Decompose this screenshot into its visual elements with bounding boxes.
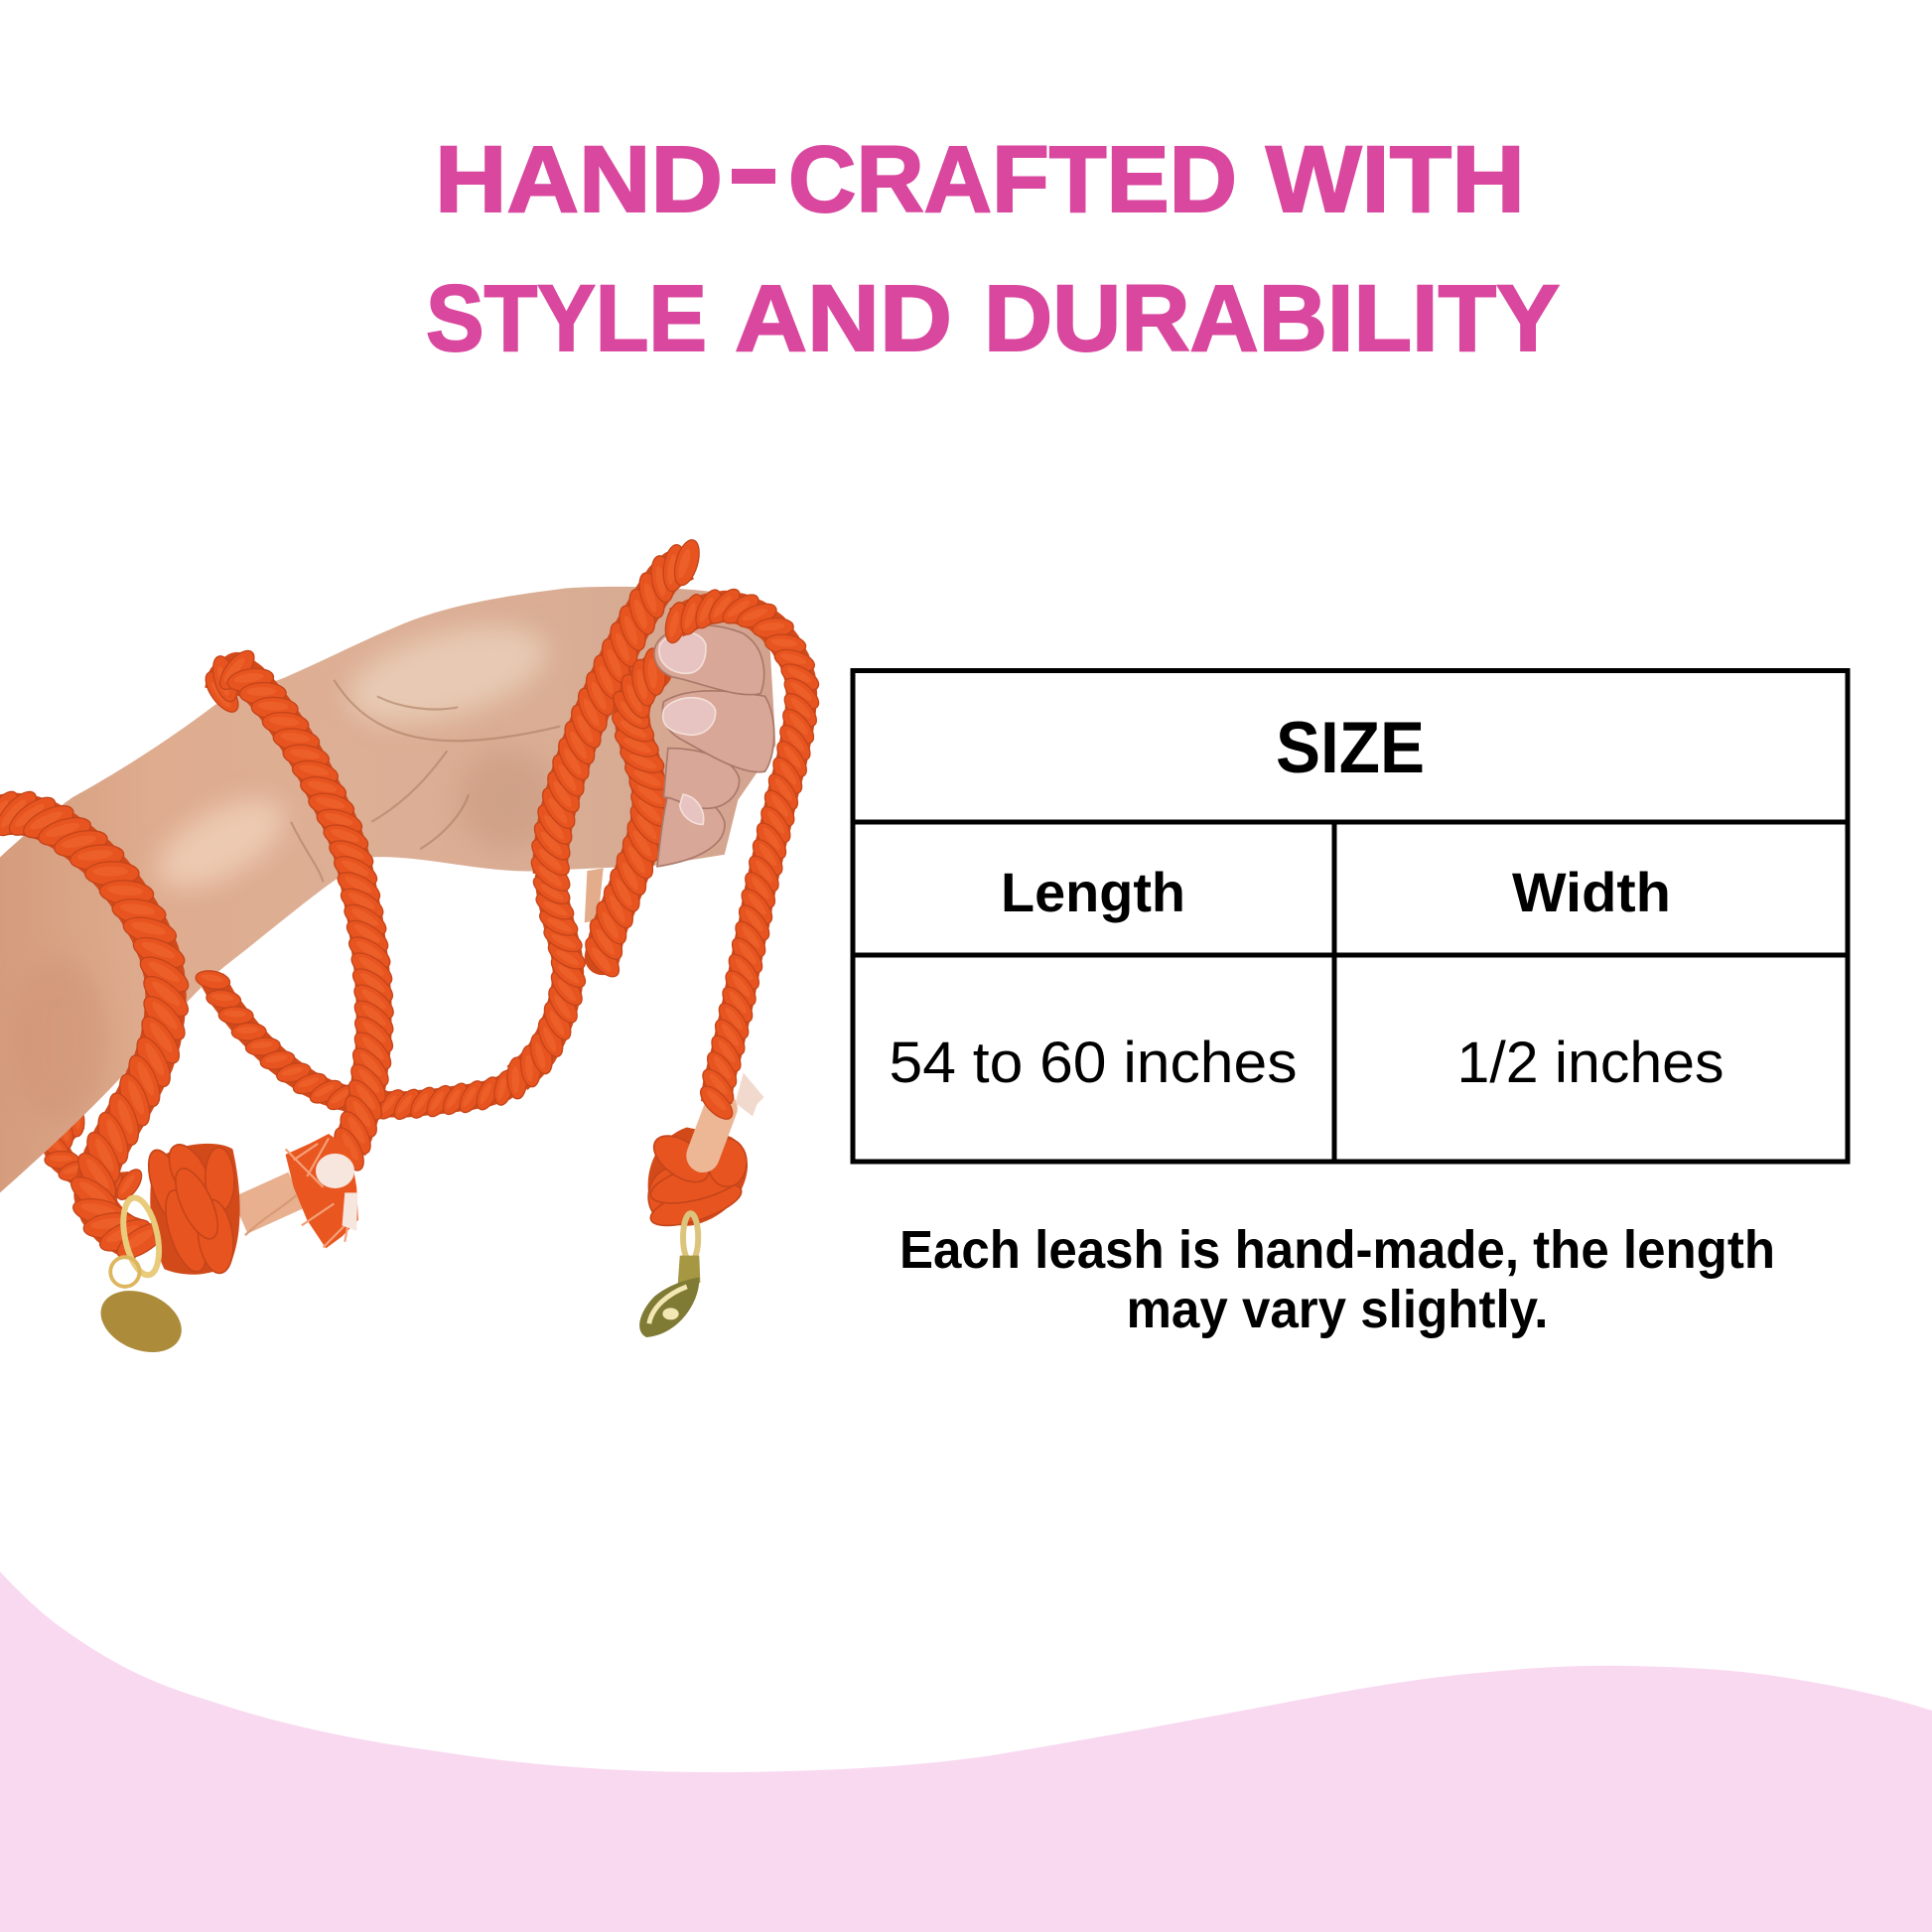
title: WITH — [1266, 127, 1525, 232]
little finger — [657, 793, 725, 867]
column heading: width: Width — [1512, 861, 1671, 923]
fingers — [654, 625, 774, 867]
panel: size table — [853, 671, 1848, 1162]
left knot — [141, 1138, 240, 1277]
arm and palm — [0, 587, 775, 1192]
right wrapped section — [703, 1108, 721, 1156]
left frayed end — [245, 1134, 358, 1248]
title: AND — [735, 266, 952, 371]
gold ring and tag — [91, 1194, 191, 1364]
rope: forearm wrap — [0, 813, 166, 1241]
rope behind arm — [55, 1119, 129, 1186]
fingernail: little finger — [680, 794, 704, 824]
index finger — [654, 625, 764, 695]
rope: upper wrist strand — [222, 670, 374, 1149]
ring finger — [663, 749, 740, 808]
title: CRAFTED — [788, 127, 1237, 232]
title: STYLE — [426, 266, 707, 371]
rope: long lower loop — [212, 563, 687, 1104]
column heading: length: Length — [1001, 861, 1185, 923]
title — [426, 127, 1560, 371]
right knot — [644, 1127, 749, 1234]
table grid — [853, 671, 1848, 1162]
note text: Each leash is hand-made, the length — [899, 1220, 1775, 1280]
title: DURABILITY — [984, 266, 1560, 371]
table heading: SIZE — [1276, 708, 1425, 788]
rope: inner loop between fingers — [603, 672, 654, 957]
value: width: 1/2 inches — [1457, 1031, 1724, 1095]
middle finger — [662, 691, 774, 772]
background wave — [0, 1572, 1932, 1932]
title: HAND — [435, 127, 723, 232]
fingernail: index — [659, 632, 706, 673]
value: length: 54 to 60 inches — [890, 1031, 1297, 1095]
note text: may vary slightly. — [1126, 1280, 1549, 1339]
fingernail: middle — [663, 698, 716, 735]
right frayed end — [736, 1072, 763, 1116]
rope: right strand to clasp — [676, 607, 801, 1103]
gold clasp — [639, 1213, 700, 1337]
note text — [899, 1220, 1775, 1339]
left wrapped section — [239, 1190, 296, 1215]
photo: hand holding orange rope leash — [0, 563, 801, 1364]
